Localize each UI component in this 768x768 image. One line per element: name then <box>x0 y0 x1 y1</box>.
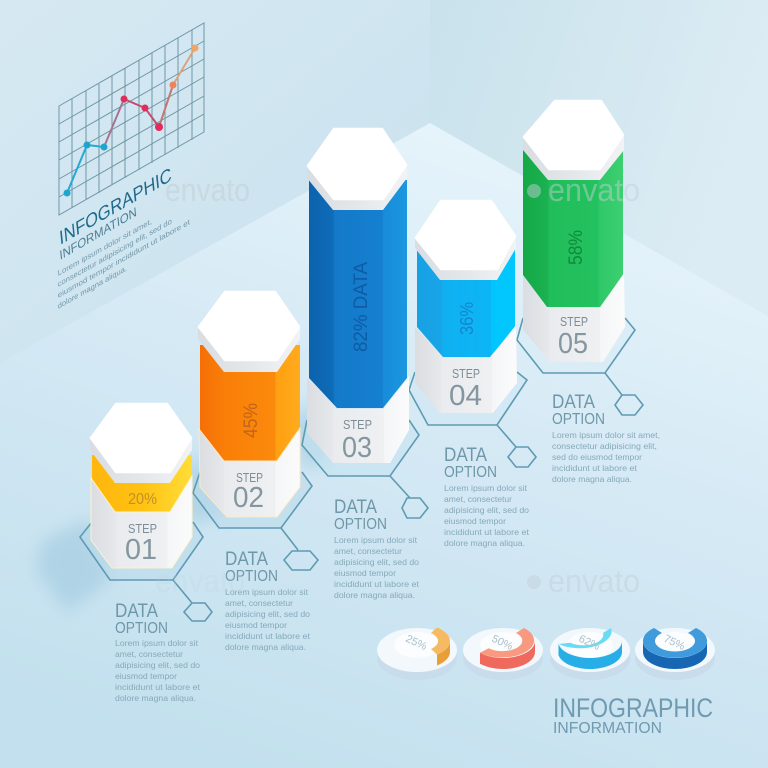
subheading: bottom information: INFORMATION <box>553 720 662 737</box>
text block: data option 2: eiusmod tempor <box>225 620 287 630</box>
text block: data option 4: DATA <box>444 445 487 466</box>
blue bar <box>309 180 407 408</box>
base <box>199 428 300 517</box>
body text: consectetur adipisicing elit, sed do <box>57 216 173 289</box>
step label: STEP <box>128 521 157 536</box>
step number: 01 <box>125 534 157 566</box>
column: step 1 <box>90 404 192 568</box>
text block: data option 3 <box>334 497 420 600</box>
text block: data option 1 <box>115 601 201 703</box>
yellow bar <box>92 455 192 513</box>
step number: 05 <box>558 328 588 360</box>
text block: data option 1: adipisicing elit, sed do <box>115 660 200 670</box>
column: step 3 <box>307 129 409 464</box>
base <box>307 376 409 463</box>
chart grid <box>59 23 204 215</box>
donut: 25%: 25% <box>404 633 429 653</box>
text block: data option 2: DATA <box>225 549 268 570</box>
base <box>415 325 517 413</box>
step label: STEP <box>452 366 480 381</box>
donut: 50%: 50% <box>490 633 515 653</box>
watermarks <box>155 172 640 599</box>
heading: INFOGRAPHIC: INFOGRAPHIC <box>58 163 173 250</box>
text block: data option 2: OPTION <box>225 568 278 585</box>
text block: data option 3: adipisicing elit, sed do <box>334 557 419 567</box>
value 20%: 20% <box>128 491 157 508</box>
watermarks: envato <box>548 563 640 599</box>
chart: isometric line graph <box>59 23 204 215</box>
cap <box>524 101 623 169</box>
text block: data option 1: OPTION <box>115 620 168 637</box>
base <box>523 273 625 362</box>
cap <box>308 129 406 199</box>
donut: 25% <box>377 628 457 680</box>
text block: data option 3: Lorem ipsum dolor sit <box>334 535 418 545</box>
donut: 50% <box>463 628 543 680</box>
step number: 04 <box>449 380 482 412</box>
text block: data option 5: sed do eiusmod tempor <box>552 452 642 462</box>
cap lip <box>198 327 300 372</box>
text block: data option 4: OPTION <box>444 464 497 481</box>
chart points <box>64 44 198 196</box>
text block: data option 3: incididunt ut labore et <box>334 579 420 589</box>
cap <box>91 404 191 472</box>
text block: data option 1: dolore magna aliqua. <box>115 693 196 703</box>
cap lip <box>523 137 624 180</box>
text block: data option 5: Lorem ipsum dolor sit amet, <box>552 430 660 440</box>
text block: data option 5 <box>552 392 660 484</box>
text block: data option 4: amet, consectetur <box>444 494 512 504</box>
value 36%: 36% <box>457 302 477 335</box>
text block: data option 2: adipisicing elit, sed do <box>225 609 310 619</box>
value 45%: 45% <box>241 403 262 438</box>
text block: data option 1: Lorem ipsum dolor sit <box>115 638 199 648</box>
text block: data option 2: dolore magna aliqua. <box>225 642 306 652</box>
watermarks: envato <box>548 172 640 208</box>
donut: 62%: 62% <box>577 633 602 653</box>
text block: data option 5: OPTION <box>552 411 605 428</box>
text block: data option 4: Lorem ipsum dolor sit <box>444 483 528 493</box>
cap <box>199 292 299 360</box>
text block: data option 1: amet, consectetur <box>115 649 183 659</box>
cap lip <box>307 166 407 210</box>
text block: data option 2: incididunt ut labore et <box>225 631 311 641</box>
light blue bar <box>417 250 515 357</box>
column: step 2 <box>198 292 300 517</box>
base <box>91 476 192 568</box>
text block: data option 5: incididunt ut labore et <box>552 463 638 473</box>
text block: data option 1: DATA <box>115 601 158 622</box>
watermarks: envato <box>165 172 250 208</box>
donut: 75% <box>635 628 715 680</box>
text block: data option 4: adipisicing elit, sed do <box>444 505 529 515</box>
column: step 5 <box>523 101 625 362</box>
cap lip <box>415 238 516 280</box>
text block: data option 3: DATA <box>334 497 377 518</box>
step number: 02 <box>233 482 264 514</box>
hexagon outlines and connectors <box>80 318 643 621</box>
text block: data option 4: incididunt ut labore et <box>444 527 530 537</box>
text block: data option 3: dolore magna aliqua. <box>334 590 415 600</box>
text block: data option 4: dolore magna aliqua. <box>444 538 525 548</box>
text block: data option 3: amet, consectetur <box>334 546 402 556</box>
text block: data option 3: OPTION <box>334 516 387 533</box>
green bar <box>523 150 623 307</box>
step number: 03 <box>342 432 372 464</box>
step label: STEP <box>343 417 372 432</box>
text block: data option 1: eiusmod tempor <box>115 671 177 681</box>
donut: 75%: 75% <box>662 633 687 653</box>
body text: dolore magna aliqua. <box>57 264 127 311</box>
orange bar <box>200 345 300 461</box>
column: step 4 <box>415 201 517 413</box>
text block: data option 5: consectetur adipisicing elit, <box>552 441 657 451</box>
chart line <box>67 48 195 193</box>
value 82% DATA: 82% DATA <box>351 262 372 352</box>
text block: data option 5: DATA <box>552 392 595 413</box>
text block: data option 5: dolore magna aliqua. <box>552 474 632 484</box>
cap <box>416 201 515 269</box>
step label: STEP <box>236 470 263 485</box>
subheading: INFORMATION: INFORMATION <box>59 204 137 263</box>
cap lip <box>90 438 192 483</box>
donut: 62% <box>550 628 630 680</box>
text block: data option 1: incididunt ut labore et <box>115 682 201 692</box>
body text: eiusmod tempor incididunt ut labore et <box>57 217 191 300</box>
body text: Lorem ipsum dolor sit amet, <box>57 217 152 278</box>
text block: data option 4: eiusmod tempor <box>444 516 506 526</box>
watermarks: envato <box>155 563 245 599</box>
value 58%: 58% <box>566 230 587 265</box>
text block: data option 4 <box>444 445 530 548</box>
text block: data option 2 <box>225 549 311 652</box>
heading: bottom infographic: INFOGRAPHIC <box>553 693 713 723</box>
column shadows <box>35 400 335 612</box>
skewed heading and text <box>57 163 191 311</box>
text block: data option 3: eiusmod tempor <box>334 568 396 578</box>
step label: STEP <box>560 314 588 329</box>
text block: data option 2: amet, consectetur <box>225 598 293 608</box>
text block: data option 2: Lorem ipsum dolor sit <box>225 587 309 597</box>
